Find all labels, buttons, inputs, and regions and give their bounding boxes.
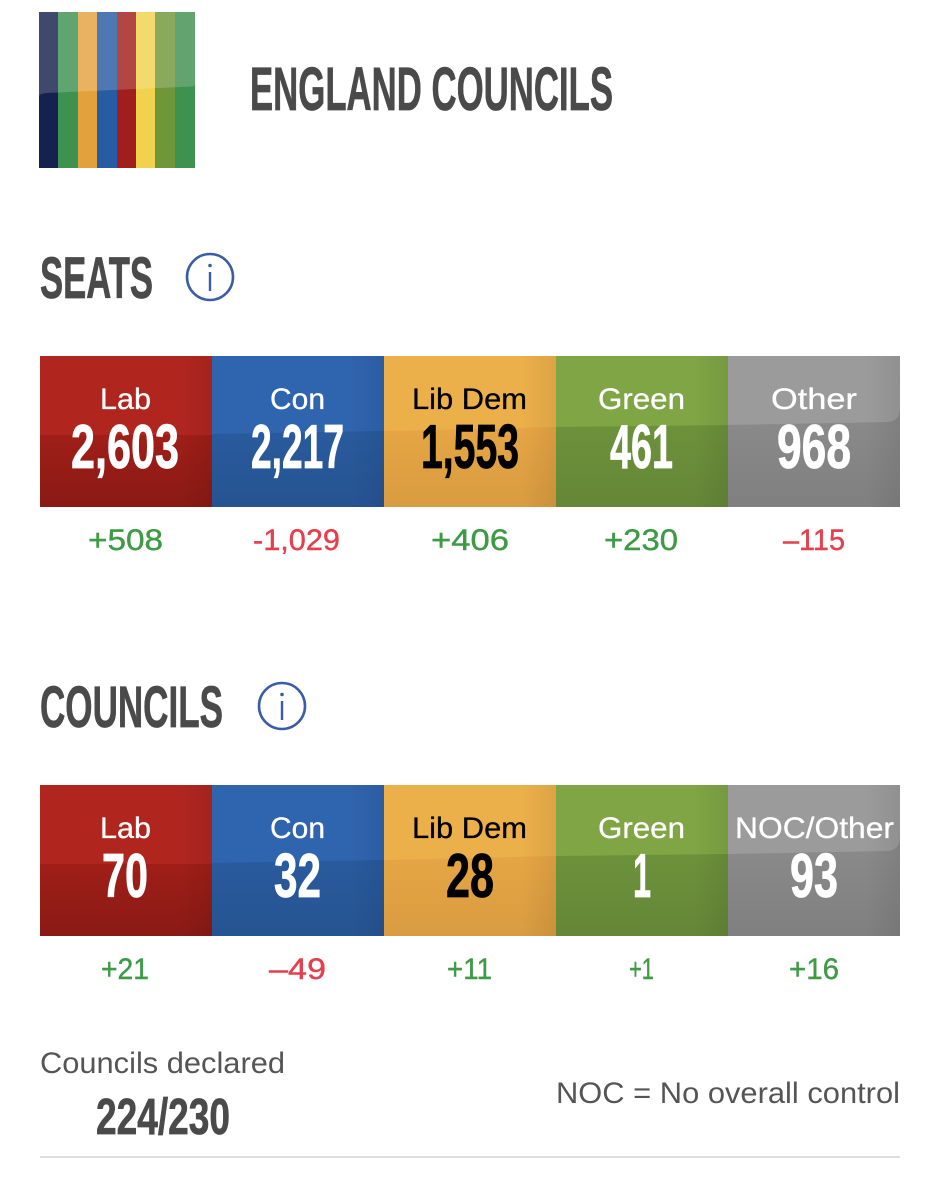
- seats: Lib Dem: [384, 356, 556, 507]
- seats: Other: 968: [777, 413, 851, 482]
- heading: councils: COUNCILS: [40, 675, 223, 740]
- councils: NOC/Other: 93: [790, 842, 838, 911]
- councils: Lib Dem: 28: [446, 842, 494, 911]
- councils: Lab: Lab: [100, 812, 151, 845]
- councils changes row: +21: [101, 953, 149, 986]
- seats: Other: [728, 356, 900, 507]
- councils: NOC/Other: NOC/Other: [735, 812, 894, 845]
- councils changes row: +11: [447, 953, 492, 986]
- councils changes row: [101, 953, 839, 986]
- seats: Con: [212, 356, 384, 507]
- seats: Lab: [40, 356, 212, 507]
- seats: Lib Dem: Lib Dem: [412, 383, 527, 416]
- seats: Lab: Lab: [100, 383, 151, 416]
- councils changes row: +16: [789, 953, 839, 986]
- councils: Lib Dem: Lib Dem: [412, 812, 527, 845]
- councils declared label: Councils declared: [40, 1047, 285, 1080]
- seats: Con: 2,217: [251, 413, 344, 482]
- seats changes row: +230: [604, 524, 678, 557]
- councils: Lib Dem: [384, 785, 556, 936]
- NOC note: NOC = No overall control: [556, 1077, 900, 1110]
- seats: Green: [556, 356, 728, 507]
- councils: Con: 32: [274, 842, 321, 911]
- icon: election stripes logo: [39, 12, 195, 168]
- councils changes row: –49: [269, 953, 326, 986]
- heading: seats: SEATS: [40, 246, 153, 311]
- councils: NOC/Other: [728, 785, 900, 936]
- seats: Lab: 2,603: [71, 413, 179, 482]
- seats changes row: +508: [88, 524, 163, 557]
- icon: seats info: [187, 254, 233, 300]
- seats changes row: –115: [783, 524, 845, 557]
- councils: Lab: [40, 785, 212, 936]
- icon: councils info: [259, 683, 305, 729]
- councils declared count: 224/230: [96, 1088, 230, 1145]
- seats: Other: Other: [771, 383, 857, 416]
- seats: Green: Green: [598, 383, 685, 416]
- councils: Green: [556, 785, 728, 936]
- seats: Lib Dem: 1,553: [421, 413, 519, 482]
- councils: Green: Green: [598, 812, 685, 845]
- councils: Con: [212, 785, 384, 936]
- councils: Green: 1: [633, 842, 651, 911]
- title: ENGLAND COUNCILS: [250, 55, 613, 123]
- councils: Con: Con: [270, 812, 325, 845]
- panel: councils results bar: [40, 785, 900, 936]
- councils changes row: +1: [629, 953, 654, 986]
- panel: seats results bar: [40, 356, 900, 507]
- seats: Con: Con: [270, 383, 325, 416]
- seats changes row: [88, 524, 845, 557]
- seats changes row: +406: [431, 524, 509, 557]
- seats changes row: -1,029: [253, 524, 340, 557]
- councils: Lab: 70: [102, 842, 148, 911]
- seats: Green: 461: [610, 413, 673, 482]
